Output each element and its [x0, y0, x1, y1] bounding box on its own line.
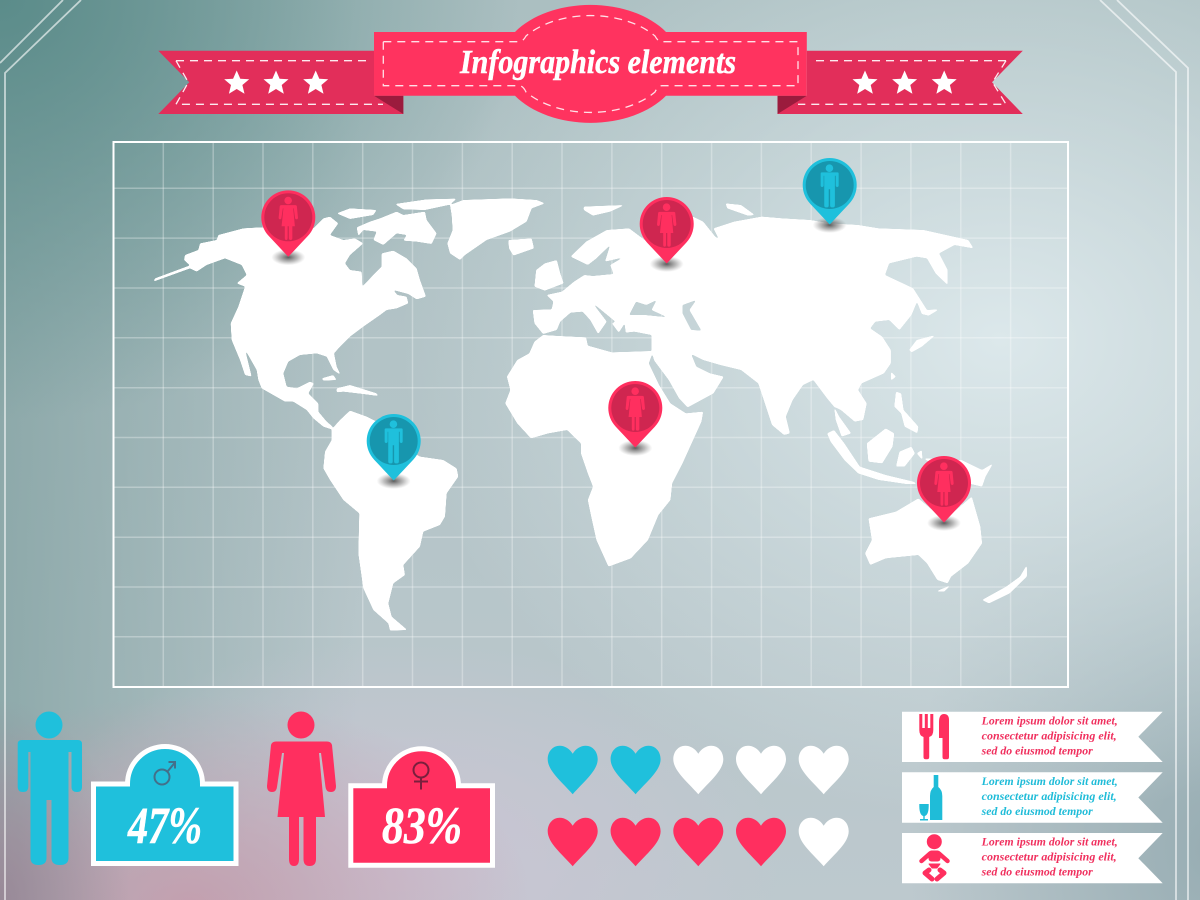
pin: australia female	[917, 456, 971, 531]
heart rating: pink row	[548, 818, 849, 866]
ribbon text	[981, 776, 1118, 818]
icon: bottle and glass	[919, 775, 942, 820]
female percentage badge	[351, 749, 492, 865]
ribbon text: consectetur adipisicing elit,	[982, 791, 1117, 803]
ribbon text: sed do eiusmod tempor	[981, 746, 1093, 758]
icon: male figure	[18, 712, 82, 865]
icon: female symbol	[414, 762, 428, 790]
title: Infographics elements	[459, 44, 736, 81]
pin: north america female	[261, 190, 315, 265]
male percentage badge	[94, 747, 236, 864]
map frame	[114, 142, 1068, 687]
eurasia and africa landmass	[505, 203, 1027, 603]
title banner	[158, 5, 1023, 123]
pin: south america male	[367, 414, 421, 489]
ribbon text: Lorem ipsum dolor sit amet,	[981, 716, 1118, 728]
americas landmass	[153, 198, 545, 631]
ribbon text: Lorem ipsum dolor sit amet,	[981, 776, 1118, 788]
map grid	[113, 142, 1068, 687]
ribbon: baby	[902, 833, 1163, 883]
ribbon text	[981, 716, 1118, 758]
ribbon text: consectetur adipisicing elit,	[982, 730, 1117, 742]
central plaque	[374, 5, 807, 123]
pin: russia male	[803, 158, 857, 233]
icon: female figure	[267, 712, 336, 866]
male percentage value: 47%	[127, 798, 202, 855]
world map panel	[113, 142, 1068, 687]
icon: baby	[922, 834, 948, 879]
ribbon text: consectetur adipisicing elit,	[982, 852, 1117, 864]
female percentage value: 83%	[382, 798, 462, 855]
icon: male symbol	[154, 762, 175, 784]
pin: africa female	[608, 381, 662, 456]
ribbon text	[981, 836, 1118, 878]
left ribbon	[158, 51, 403, 114]
right ribbon	[778, 51, 1023, 114]
ribbon: drink	[902, 772, 1163, 823]
world landmasses	[153, 198, 1027, 631]
ribbon text: sed do eiusmod tempor	[981, 806, 1093, 818]
pin: europe female	[640, 197, 694, 272]
heart rating: cyan row	[548, 746, 849, 794]
ribbon text: sed do eiusmod tempor	[981, 866, 1093, 878]
icon: fork and knife	[919, 714, 949, 759]
ribbon: food	[902, 712, 1163, 762]
ribbon text: Lorem ipsum dolor sit amet,	[981, 836, 1118, 848]
